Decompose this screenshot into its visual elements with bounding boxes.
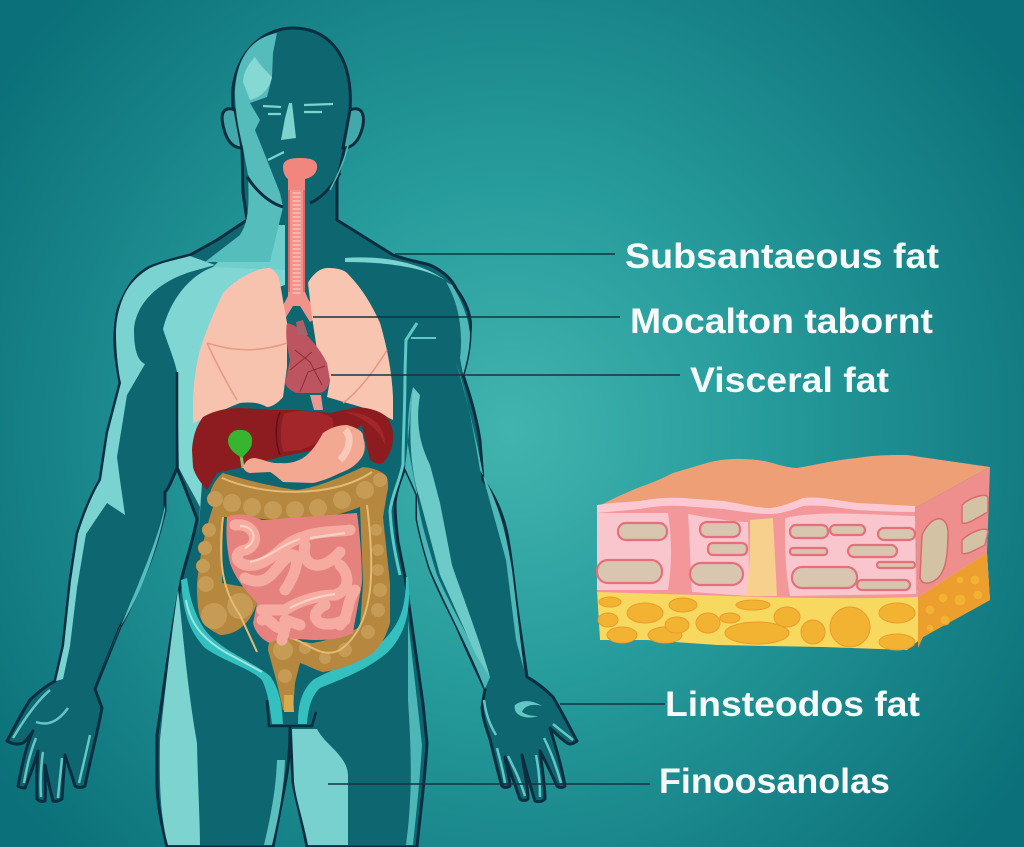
- label: Subsantaeous fat: Subsantaeous fat: [625, 237, 939, 276]
- small intestine: [226, 513, 362, 643]
- pelvis outline: [267, 700, 316, 726]
- fat layer: [597, 553, 990, 650]
- liver: [192, 407, 393, 490]
- shoulder highlight right: [345, 257, 445, 280]
- dermis front face: [597, 500, 918, 598]
- body silhouette: [7, 28, 577, 847]
- left armpit line: [176, 372, 178, 468]
- skin surface: [597, 455, 990, 510]
- dermis columns: [597, 513, 916, 596]
- chin line: [247, 173, 340, 207]
- label: Linsteodos fat: Linsteodos fat: [665, 685, 920, 724]
- right hand highlights: [484, 700, 573, 797]
- human body figure: [7, 28, 577, 847]
- head light shading: [235, 33, 283, 207]
- gallbladder: [228, 430, 252, 468]
- ears: [222, 109, 363, 148]
- facial features: [263, 104, 333, 160]
- head highlight: [243, 57, 272, 100]
- left arm inner rim: [100, 505, 165, 675]
- right leg light band: [292, 729, 348, 845]
- heart: [285, 320, 330, 410]
- chest light area: [163, 265, 285, 540]
- trachea: [278, 158, 319, 322]
- left pelvic band: [181, 578, 283, 724]
- right arm outer rim: [446, 282, 524, 670]
- right pelvic band: [298, 577, 409, 724]
- label: Mocalton tabornt: Mocalton tabornt: [630, 302, 933, 341]
- right arm lit strips: [405, 387, 490, 689]
- left leg light band: [160, 590, 200, 845]
- leader lines: [313, 254, 680, 784]
- skin cross-section: [597, 455, 990, 650]
- left arm rim light: [56, 256, 215, 681]
- dermis side face: [915, 467, 990, 597]
- left hand highlights: [13, 690, 90, 798]
- large intestine: [196, 467, 390, 712]
- right chest curve: [390, 323, 417, 575]
- torso upper strip: [213, 225, 285, 270]
- lungs: [193, 268, 393, 423]
- stomach: [243, 425, 365, 483]
- label: Finoosanolas: Finoosanolas: [659, 762, 890, 801]
- label: Visceral fat: Visceral fat: [690, 361, 889, 400]
- neck light shading: [205, 178, 283, 262]
